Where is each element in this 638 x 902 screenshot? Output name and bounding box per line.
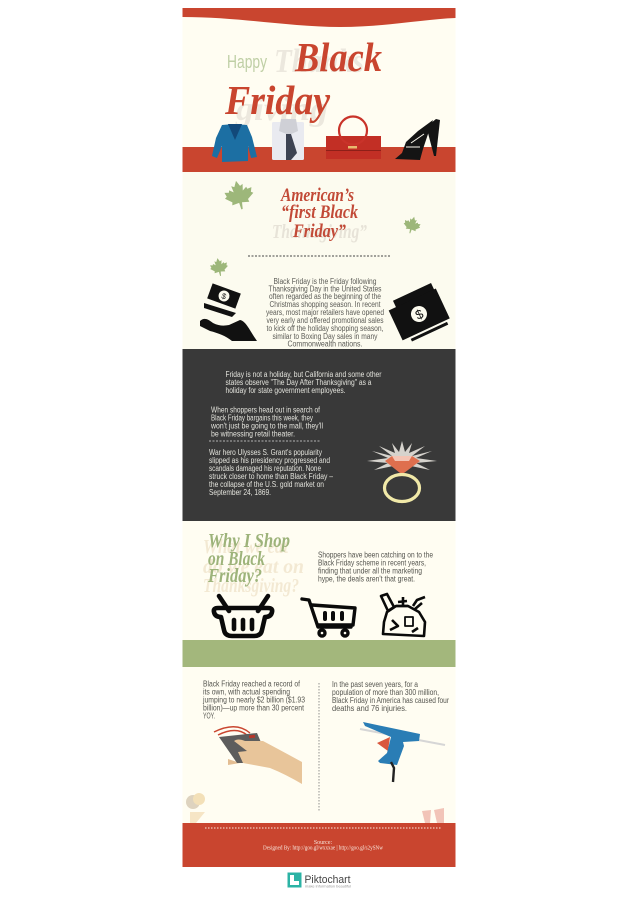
text: deaths and injuries: Black Friday in America has caused four bbox=[332, 696, 449, 705]
red wave banner bbox=[182, 8, 456, 27]
text: Ulysses S. Grant: September 24, 1869. bbox=[209, 488, 271, 497]
icon: money and open hand: $ bbox=[220, 291, 228, 302]
text: definition: Christmas shopping season. In recent bbox=[270, 300, 381, 309]
text: Ulysses S. Grant: struck closer to home than Black Friday – bbox=[209, 472, 333, 481]
text: scheme note: Black Friday scheme in recent years, bbox=[318, 558, 426, 568]
ghost heading: do we eat on bbox=[203, 556, 304, 578]
text: retail theater bbox=[210, 406, 323, 438]
red floor band bbox=[182, 147, 456, 172]
text: Ulysses S. Grant: scandals damaged his reputation. None bbox=[209, 464, 321, 473]
text: record spending: Black Friday reached a record of bbox=[203, 679, 301, 688]
ghost heading: Thanksgiving? bbox=[203, 575, 299, 597]
text: definition: similar to Boxing Day sales in many bbox=[272, 332, 378, 341]
icon: banknotes: $ bbox=[413, 306, 426, 323]
heading: American’s bbox=[280, 185, 354, 206]
heading: “first Black bbox=[281, 202, 358, 223]
text: definition: years, most major retailers have opened bbox=[266, 308, 384, 317]
text: definition: Thanksgiving Day in the United States bbox=[268, 284, 382, 294]
icon: diamond ring bbox=[367, 441, 437, 502]
text: retail theater: When shoppers head out in search of bbox=[211, 406, 321, 414]
text: source credits bbox=[263, 840, 384, 852]
text: definition bbox=[266, 277, 384, 348]
text: record spending bbox=[202, 679, 305, 721]
text: Ulysses S. Grant: slipped as his presidency progressed and bbox=[209, 456, 330, 465]
text: holiday note: Friday is not a holiday, but California and some other bbox=[226, 370, 382, 379]
icon: money and open hand bbox=[200, 283, 257, 341]
ghost heading bbox=[235, 43, 364, 128]
text: Ulysses S. Grant: War hero Ulysses S. Grant's popularity bbox=[209, 448, 322, 457]
text: retail theater: be witnessing retail theater. bbox=[211, 430, 295, 438]
text: record spending: its own, with actual spending bbox=[203, 687, 290, 696]
text: retail theater: Black Friday bargains this week, they bbox=[211, 414, 313, 422]
icon: maple leaf large bbox=[222, 178, 256, 212]
text: scheme note: finding that under all the marketing bbox=[318, 566, 422, 576]
logo: Piktochart: make information beautiful bbox=[305, 884, 351, 888]
text: scheme note: hype, the deals aren't that great. bbox=[318, 574, 415, 584]
icon: folded shirt with tie bbox=[272, 119, 304, 160]
heading: Friday? bbox=[207, 565, 262, 587]
text: record spending: billion)—up more than 30 percent bbox=[203, 704, 305, 713]
text: deaths and injuries bbox=[332, 680, 449, 713]
icon: red handbag bbox=[326, 116, 381, 159]
panel: spending and injuries bbox=[182, 667, 456, 823]
logo: Piktochart bbox=[288, 872, 351, 888]
icon: maple leaf lower bbox=[209, 257, 229, 277]
text: Happy: Happy bbox=[227, 52, 267, 72]
ghost heading bbox=[203, 536, 304, 597]
text: retail theater: won't just be going to the mall, they'll bbox=[210, 422, 323, 430]
heading: on Black bbox=[208, 548, 265, 570]
text: holiday note bbox=[226, 370, 382, 395]
icon: blue jacket bbox=[212, 124, 257, 162]
title: Black Friday bbox=[224, 34, 382, 123]
text: definition: Black Friday is the Friday following bbox=[274, 277, 376, 286]
text: holiday note: states observe "The Day After Thanksgiving" as a bbox=[226, 378, 372, 387]
icon: faded drinks bbox=[422, 808, 444, 823]
text: deaths and injuries: In the past seven years, for a bbox=[332, 680, 418, 689]
panel: green band bbox=[182, 640, 456, 667]
text: holiday note: holiday for state government employees. bbox=[226, 386, 346, 395]
icon: shopping cart bbox=[302, 599, 355, 636]
heading bbox=[207, 530, 290, 587]
text: scheme note: Shoppers have been catching on to the bbox=[318, 550, 433, 560]
panel: dark facts bbox=[182, 349, 456, 521]
panel: footer bbox=[182, 823, 456, 867]
text: record spending: jumping to nearly $2 billion ($1.93 bbox=[202, 696, 305, 705]
icon: basket bbox=[214, 596, 272, 636]
text: source credits: Designed By: http://goo.gl/wxxxae | http://goo.gl/s2ySNw bbox=[263, 846, 384, 852]
icon: banknotes bbox=[386, 282, 452, 345]
icon: grocery bag bbox=[381, 594, 425, 636]
ghost heading: giving bbox=[235, 91, 328, 128]
panel: why I shop bbox=[182, 521, 456, 640]
text: source credits: Source: bbox=[314, 840, 332, 846]
title: Black Friday: Black bbox=[294, 34, 382, 80]
heading: Why I Shop bbox=[208, 530, 290, 552]
icon: black high heel bbox=[395, 119, 440, 160]
icon: glue gun bbox=[360, 722, 445, 782]
text: deaths and injuries: deaths and 76 injuries. bbox=[332, 704, 407, 713]
title: Black Friday: Friday bbox=[224, 77, 331, 123]
heading: Friday” bbox=[292, 221, 346, 242]
text: Ulysses S. Grant bbox=[209, 448, 333, 497]
icon: maple leaf right bbox=[402, 215, 422, 235]
text: record spending: YOY. bbox=[203, 712, 215, 721]
icon: hand with remote bbox=[214, 727, 302, 784]
text: deaths and injuries: population of more than 300 million, bbox=[332, 688, 439, 697]
text: definition: very early and offered promotional sales bbox=[266, 316, 384, 325]
ghost heading: What we eat bbox=[203, 536, 289, 558]
text: definition: to kick off the holiday shopping season, bbox=[266, 324, 384, 333]
text: definition: Commonwealth nations. bbox=[288, 340, 362, 348]
panel: hero header bbox=[182, 8, 456, 172]
logo: Piktochart: Piktochart bbox=[304, 874, 350, 886]
text: scheme note bbox=[318, 550, 433, 584]
panel: first Black Friday bbox=[182, 172, 456, 349]
text: definition: often regarded as the beginning of the bbox=[269, 292, 381, 301]
text: Ulysses S. Grant: the collapse of the U.S. gold market on bbox=[209, 480, 324, 489]
icon: faded ice cream bbox=[186, 793, 205, 823]
heading bbox=[280, 185, 358, 242]
ghost word: Thanksgiving: Thanksgiving” bbox=[272, 221, 367, 243]
ghost heading: Thanks bbox=[274, 43, 364, 80]
